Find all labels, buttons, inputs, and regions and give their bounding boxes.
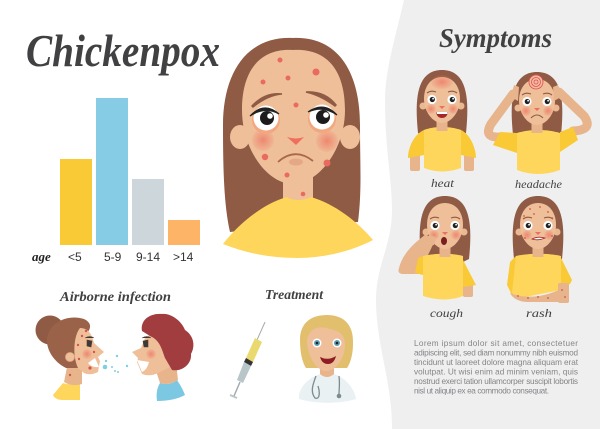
smile	[320, 356, 336, 364]
ear	[66, 352, 74, 362]
heading: airborne infection: Airborne infection	[59, 289, 171, 304]
body text: adipiscing elit, sed diam nonummy nibh euismod	[414, 348, 578, 358]
face	[242, 50, 345, 184]
bar: under 5	[60, 159, 92, 245]
body text: Lorem ipsum dolor sit amet, consectetuer	[414, 339, 578, 348]
cheek	[146, 349, 156, 359]
neck	[153, 362, 178, 384]
curly hair	[142, 314, 193, 370]
body text: nisl ut aliquip ex ea commodo consequat.	[414, 386, 549, 396]
nose	[287, 137, 304, 145]
eye	[142, 336, 151, 347]
mouth	[278, 154, 313, 162]
droplets	[103, 355, 128, 373]
heading: treatment: Treatment	[265, 287, 324, 302]
label: cough	[430, 306, 463, 320]
neck	[283, 175, 313, 204]
axis labels: 9-14	[136, 250, 160, 264]
ears	[230, 125, 250, 149]
eyes	[312, 338, 342, 348]
eye and mouth	[85, 336, 94, 347]
eyes	[250, 104, 337, 134]
body text	[414, 339, 579, 396]
rash spots	[260, 58, 330, 196]
label: heat	[431, 176, 455, 190]
eyebrows	[252, 94, 282, 107]
body text: tincidunt ut laoreet dolore magna aliquam erat	[414, 358, 579, 367]
shirt	[223, 197, 373, 258]
body text: nostrud exerci tation ullamcorper suscipit lobortis	[414, 377, 578, 386]
stethoscope	[312, 376, 339, 398]
bar: 5-9	[96, 98, 128, 245]
rash spots	[69, 330, 95, 376]
bar: 9-14	[132, 179, 164, 245]
shirt	[157, 380, 185, 401]
cheek	[82, 349, 92, 359]
bar: over 14	[168, 220, 200, 245]
bar chart: cases by age	[32, 98, 200, 264]
panel: symptoms background	[376, 0, 600, 429]
face	[307, 327, 345, 371]
symptom: cough	[398, 196, 476, 320]
cheeks	[252, 129, 274, 151]
label: rash	[526, 306, 552, 320]
neck	[64, 362, 82, 385]
symptom: rash	[507, 196, 572, 320]
mouth	[137, 360, 149, 372]
hair	[47, 318, 90, 368]
main illustration: girl with chickenpox	[223, 38, 373, 258]
hair	[223, 38, 360, 232]
hair	[300, 315, 353, 368]
axis labels: <5	[68, 250, 82, 264]
body text: volutpat. Ut wisi enim ad minim veniam, quis	[414, 368, 578, 376]
icon: syringe	[230, 322, 265, 398]
axis labels: >14	[173, 250, 194, 264]
face	[74, 328, 104, 374]
axis title: age	[32, 249, 51, 264]
illustration: healthy person in profile	[132, 314, 193, 401]
heading: symptoms: Symptoms	[439, 23, 552, 53]
axis labels	[68, 250, 194, 264]
illustration: infected person in profile	[36, 316, 104, 400]
illustration: doctor	[299, 315, 356, 403]
title: Chickenpox	[26, 25, 220, 76]
axis labels: 5-9	[104, 250, 122, 264]
shirt	[53, 382, 80, 400]
label: headache	[515, 177, 563, 191]
neck	[320, 362, 334, 377]
hair bun	[36, 316, 64, 344]
symptom: heat	[408, 70, 476, 190]
coat	[299, 374, 356, 403]
symptom: headache	[488, 72, 587, 191]
face	[132, 328, 178, 375]
